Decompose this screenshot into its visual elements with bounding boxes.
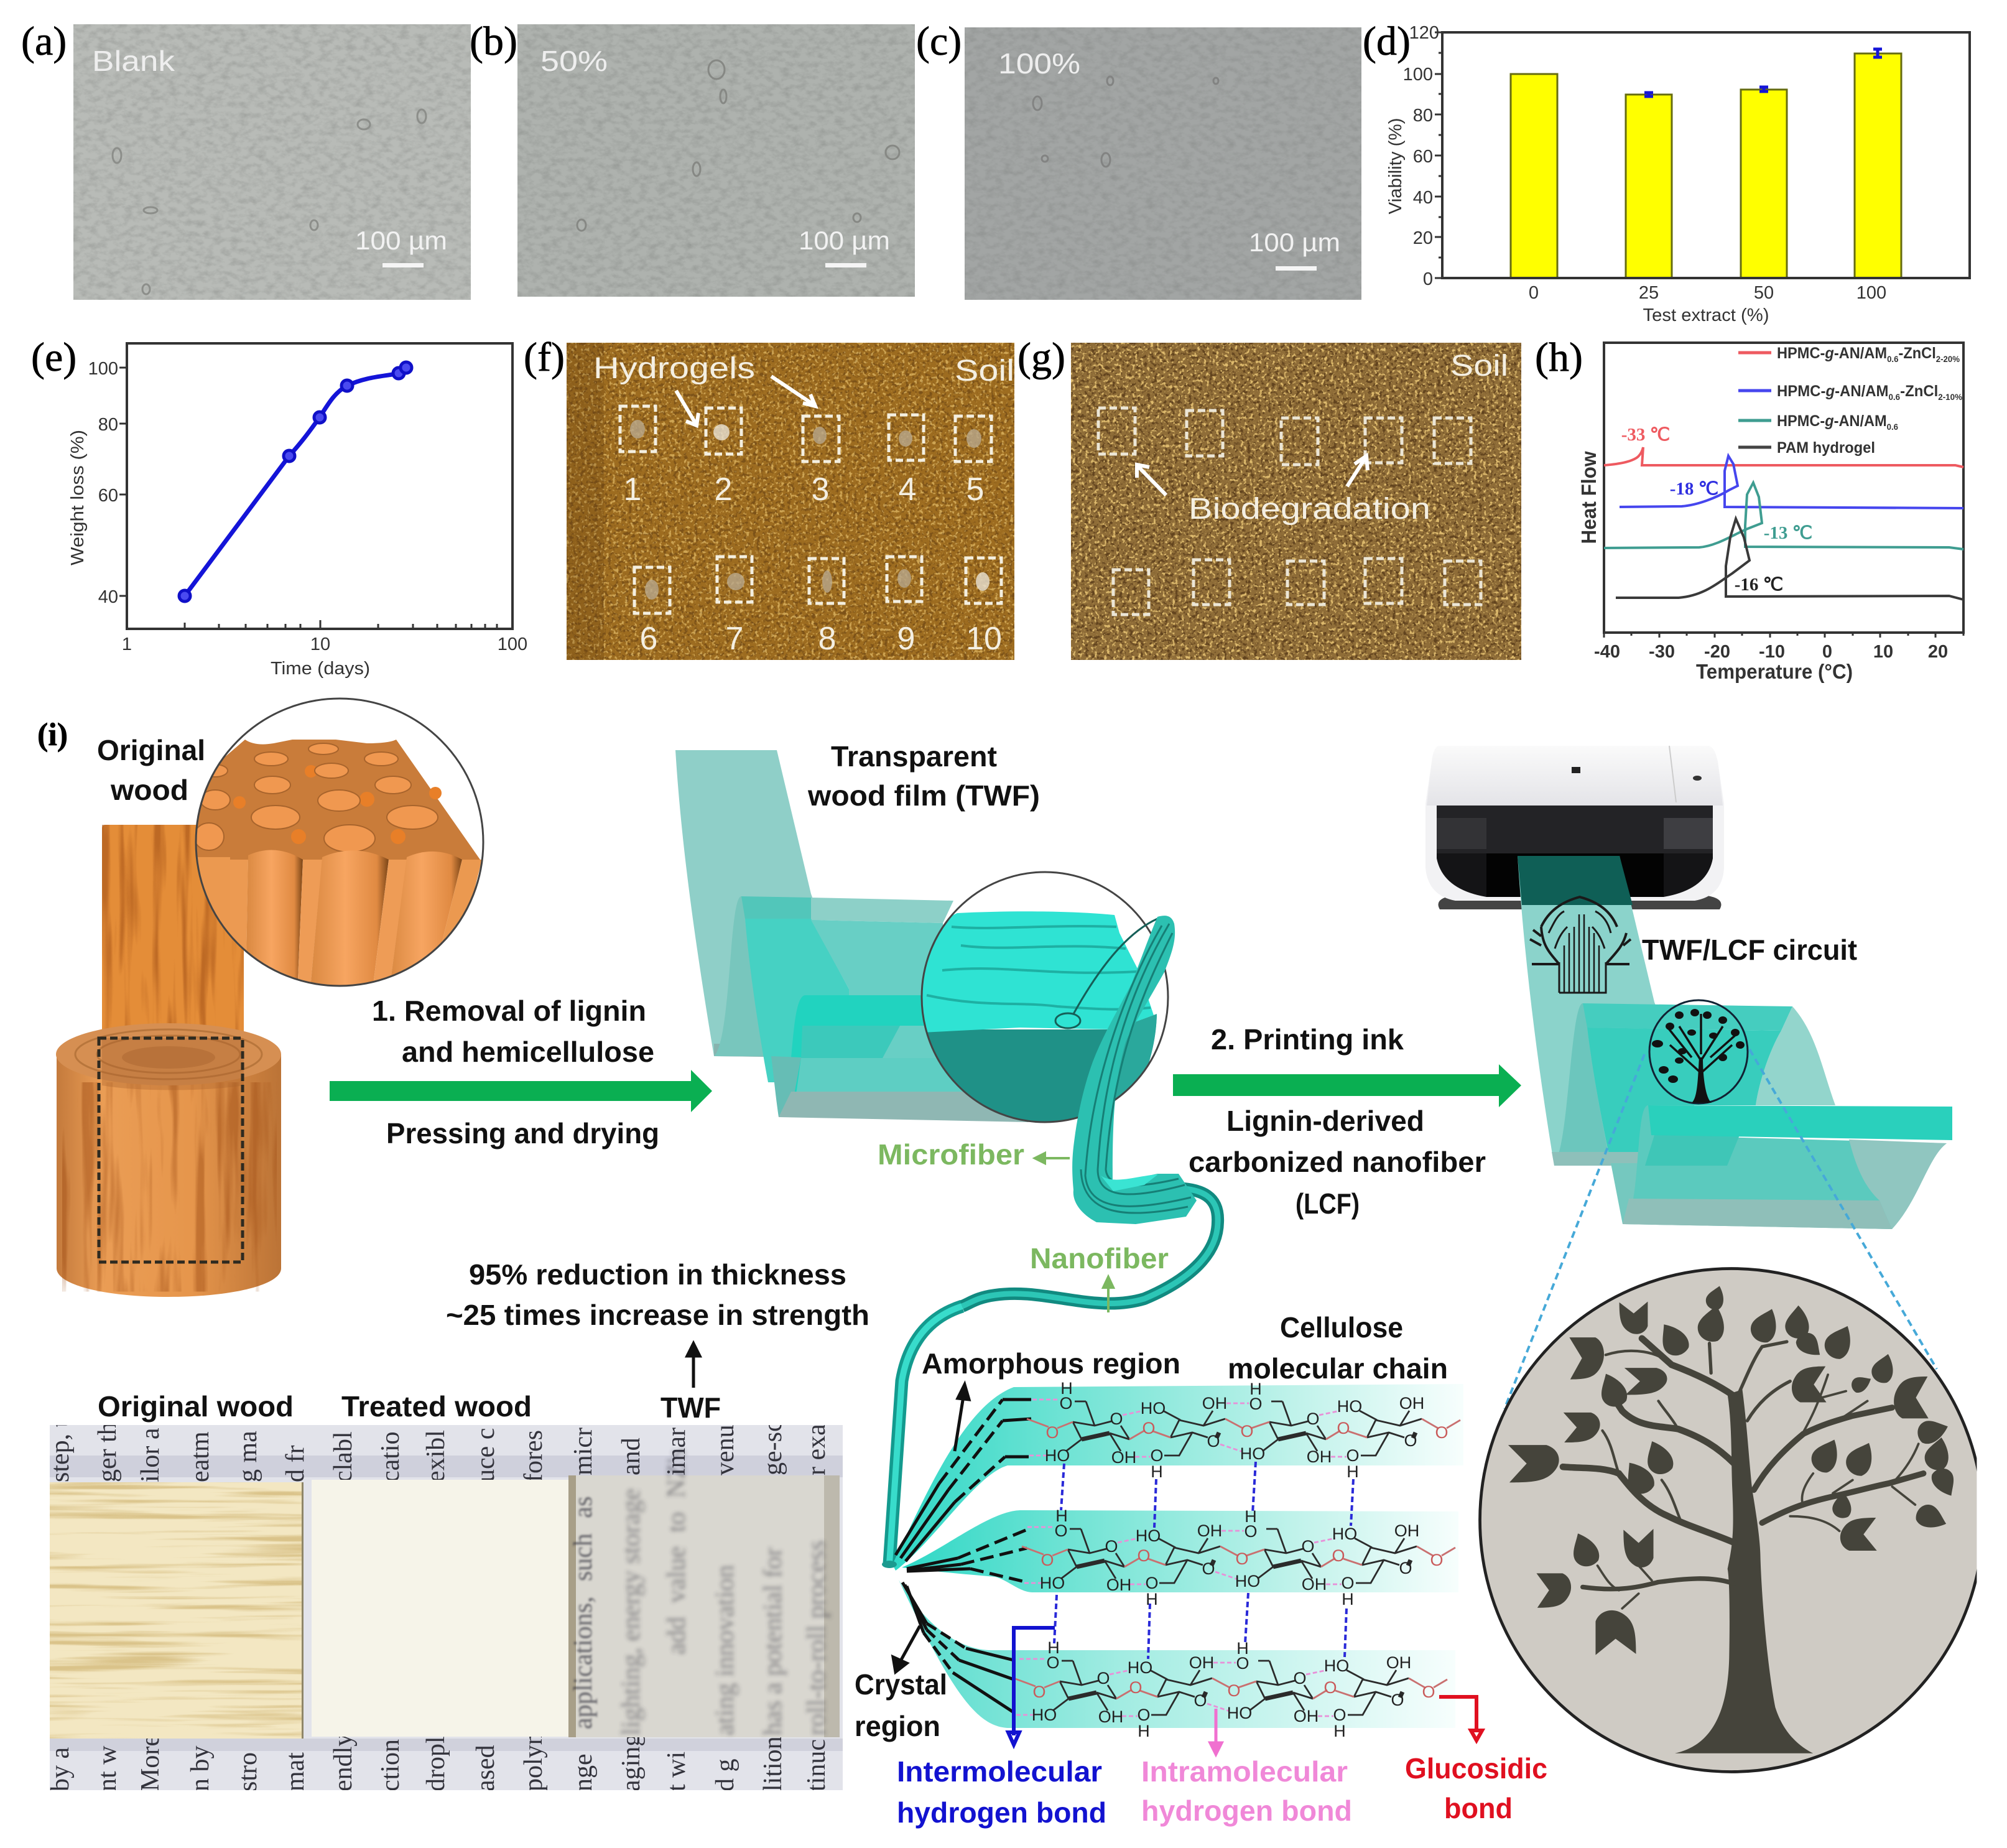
cellulose chain 3: O: [1323, 1678, 1337, 1697]
label (i): (i): [37, 717, 68, 753]
panel e: weight loss line chart: 80: [98, 415, 118, 435]
panel d: viability bar chart: 50: [1754, 283, 1774, 303]
text: removal of lignin step: Pressing and drying: [386, 1117, 659, 1149]
cellulose chain 3: O: [1227, 1681, 1241, 1700]
legend: 2-20%: [1936, 354, 1960, 364]
printed text bottom fragments: stro: [234, 1752, 262, 1791]
printed text bottom fragments: t wi: [662, 1752, 691, 1791]
panel e: weight loss line chart: Weight loss (%): [68, 430, 88, 565]
cellulose chain 2: O: [1041, 1551, 1054, 1569]
panel h: DSC heat flow chart: -40: [1594, 642, 1620, 662]
cellulose fibril bands: [892, 1384, 1463, 1728]
label: Original wood: Original: [97, 734, 205, 766]
curve labels: [1621, 425, 1812, 595]
label (h): (h): [1535, 335, 1583, 380]
printed text top fragments: fores: [519, 1430, 548, 1482]
printed text bottom fragments: nt w: [93, 1745, 122, 1791]
cellulose chain 1: OH: [1399, 1394, 1424, 1413]
TWF ribbon roll (left): [675, 750, 1029, 1122]
labels above photo: Treated wood: [341, 1390, 532, 1423]
printed text bottom fragments: nge: [569, 1753, 598, 1791]
cellulose chain 2: O: [1332, 1546, 1345, 1565]
panel e: weight loss line chart: Time (days): [271, 659, 370, 679]
panel h: DSC heat flow chart: -20: [1704, 642, 1730, 662]
label (c): (c): [916, 19, 962, 64]
magnified printed tree: [1480, 1269, 1983, 1771]
arrows: to hydrogels: [676, 376, 815, 425]
printed text top fragments: uce c: [471, 1428, 500, 1482]
cellulose chain 3: OH: [1189, 1653, 1214, 1672]
printed text top fragments: ger th: [93, 1422, 122, 1482]
labels above photo: Original wood: [98, 1390, 294, 1423]
panel d: viability bar chart: 100: [1856, 283, 1886, 303]
printed text bottom fragments: ction: [376, 1739, 405, 1791]
fibre bundle: microfiber to nanofiber: [889, 916, 1218, 1564]
panel h: DSC heat flow chart: 0: [1822, 642, 1832, 662]
printed text bottom fragments: [50, 1737, 825, 1790]
cellulose chain 2: OH: [1197, 1521, 1222, 1540]
cellulose chain 3: OH: [1294, 1707, 1319, 1725]
panel e: weight loss line chart: [68, 343, 527, 679]
cellulose chain 1: O: [1435, 1423, 1448, 1442]
text: printing ink step: carbonized nanofiber: [1189, 1146, 1486, 1178]
arrow: TWF up to result: [687, 1344, 700, 1388]
treated wood sample: [312, 1480, 568, 1737]
arrow: intermolecular bond pointer: [1008, 1628, 1055, 1745]
cellulose chain 1: OH: [1111, 1448, 1136, 1467]
dashed zoom guide lines: [1504, 1049, 1937, 1409]
cellulose chain 2: O: [1054, 1521, 1068, 1540]
text: thickness and strength result: ~25 times increase in strength: [446, 1299, 869, 1331]
cellulose chain 3: [1014, 1638, 1447, 1740]
panel h: DSC heat flow chart: -10: [1759, 642, 1785, 662]
label: intermolecular hydrogen bond: Intermolecular: [897, 1755, 1102, 1788]
printed text top fragments: eatm: [186, 1431, 215, 1482]
cellulose chain 3: HO: [1128, 1658, 1152, 1677]
panel h: DSC heat flow chart: Heat Flow: [1577, 451, 1600, 544]
cellulose chain 1: H: [1346, 1462, 1359, 1481]
panel e: weight loss line chart: 100: [498, 634, 527, 654]
legend: HPMC-g-AN/AM: [1777, 345, 1890, 362]
cellulose chain 1: O: [1045, 1423, 1059, 1442]
cellulose chain 1: OH: [1202, 1394, 1227, 1413]
cellulose chain 2: O: [1399, 1559, 1412, 1577]
cellulose chain 3: O: [1391, 1691, 1404, 1709]
tree trunk and branches: [1563, 1339, 1924, 1753]
legend: 0.6: [1887, 422, 1898, 432]
cellulose chain 1: H: [1151, 1462, 1163, 1481]
sample numbers: 4: [899, 471, 916, 508]
panel d: viability bar chart: 0: [1423, 269, 1433, 289]
panel d: viability bar chart: Viability (%): [1386, 118, 1406, 214]
text: thickness and strength result: [446, 1258, 869, 1331]
TWF film with blurred text: roll-to-roll process: [802, 1540, 831, 1735]
panel h: DSC heat flow chart: 20: [1928, 642, 1948, 662]
label (b): (b): [470, 19, 517, 64]
text: printing ink step: Lignin-derived: [1226, 1105, 1424, 1137]
arrows: to empty squares: [1137, 456, 1368, 495]
label: intramolecular hydrogen bond: hydrogen bond: [1141, 1795, 1352, 1827]
TWF film with blurred text: lighting, energy storage: [617, 1488, 646, 1735]
panel d: viability bar chart: 100: [1403, 65, 1433, 85]
label: Hydrogels: Hydrogels: [593, 352, 755, 385]
cellulose chain 2: O: [1105, 1537, 1118, 1556]
cellulose chain 1: O: [1337, 1419, 1350, 1437]
curve labels: -33 ℃: [1621, 425, 1670, 445]
printed text bottom fragments: dropl: [422, 1736, 450, 1791]
label: Soil: Soil: [1450, 350, 1508, 383]
cellulose chain 3: O: [1422, 1683, 1435, 1701]
label: intermolecular hydrogen bond: [897, 1755, 1106, 1829]
TWF/LCF ribbon (right): [1518, 856, 1952, 1229]
cellulose chain 2: H: [1146, 1590, 1158, 1609]
cellulose chain 1: O: [1240, 1422, 1254, 1441]
cellulose chain 1: O: [1306, 1409, 1320, 1428]
panel b: 50% cell micrograph: [517, 24, 915, 297]
panel d: viability bar chart: 80: [1413, 106, 1433, 126]
legend: HPMC-g-AN/AM: [1777, 383, 1891, 400]
printed text bottom fragments: n by: [186, 1745, 215, 1791]
text: printing ink step: (LCF): [1296, 1187, 1360, 1220]
cellulose chain 1: O: [1142, 1419, 1156, 1437]
cellulose chain 1: H: [1060, 1379, 1073, 1398]
printed text bottom fragments: d g: [711, 1759, 739, 1791]
label: 100%: 100%: [998, 47, 1080, 80]
label: Original wood: wood: [110, 774, 188, 806]
printed text top fragments: [53, 1425, 825, 1482]
arrow: crystal region: [893, 1626, 920, 1672]
label (a): (a): [21, 19, 67, 64]
panel h: DSC heat flow chart: -30: [1649, 642, 1675, 662]
label: crystal region: [855, 1668, 947, 1742]
scale bar a: 100 µm: [355, 226, 447, 255]
fibre stub cap: [882, 1561, 897, 1568]
tree leaves: [1508, 1283, 1962, 1655]
legend: -ZnCl: [1900, 383, 1938, 400]
label: intermolecular hydrogen bond: hydrogen bond: [897, 1796, 1106, 1829]
cellulose chain 1: OH: [1307, 1447, 1332, 1466]
magnified fibre cross-section: [914, 872, 1168, 1126]
arrow 1: green process arrow: [330, 1070, 712, 1112]
scale bar c: [1249, 228, 1340, 271]
cellulose chain 1: O: [1150, 1446, 1164, 1465]
TWF film with blurred text: has a potential for: [759, 1548, 787, 1735]
cellulose chain 2: O: [1137, 1546, 1151, 1565]
cellulose chain 3: O: [1293, 1669, 1307, 1688]
cellulose chain 2: O: [1430, 1551, 1444, 1569]
printed text top fragments: ge-sc: [759, 1420, 787, 1475]
printed text top fragments: and: [617, 1437, 646, 1475]
printed text bottom fragments: Morec: [136, 1723, 165, 1791]
text: thickness and strength result: 95% reduction in thickness: [469, 1258, 846, 1291]
cellulose chain 3: H: [1047, 1638, 1060, 1657]
cellulose chain 3: O: [1333, 1706, 1346, 1724]
cellulose chain 2: H: [1245, 1507, 1257, 1526]
cellulose chain 3: O: [1137, 1706, 1151, 1724]
printer: [1425, 746, 1724, 909]
cellulose chain 2: OH: [1106, 1576, 1131, 1594]
cellulose chain 2: O: [1244, 1522, 1258, 1541]
cellulose chain 3: O: [1032, 1683, 1046, 1701]
printed text bottom fragments: polyn: [519, 1732, 548, 1791]
cellulose chain 1: O: [1346, 1446, 1360, 1465]
label: intramolecular hydrogen bond: Intramolecular: [1141, 1755, 1348, 1788]
cellulose chain 2: OH: [1302, 1575, 1327, 1594]
label: Original wood: [97, 734, 205, 806]
legend: -ZnCl: [1898, 345, 1936, 362]
printed text top fragments: imar: [662, 1428, 691, 1475]
TWF film with blurred text: ating innovation: [711, 1565, 739, 1735]
cellulose chain 1: O: [1249, 1395, 1263, 1413]
label: Biodegradation: Biodegradation: [1189, 493, 1430, 526]
panel e: weight loss line chart: 10: [310, 634, 330, 654]
label (g): (g): [1017, 335, 1065, 380]
legend: HPMC-g-AN/AM: [1777, 412, 1890, 430]
cellulose chain 2: O: [1235, 1549, 1249, 1568]
cellulose chain 2: H: [1342, 1590, 1354, 1609]
photo: original wood, treated wood and TWF on printed page: [46, 1419, 843, 1791]
printed text bottom fragments: ased: [471, 1745, 500, 1791]
cellulose chain 1: O: [1207, 1432, 1220, 1451]
cellulose chain 2: HO: [1040, 1574, 1065, 1592]
printed text top fragments: clabl: [329, 1431, 358, 1482]
text: printing ink step: 2. Printing ink: [1211, 1023, 1404, 1056]
printed text top fragments: r exa: [802, 1424, 831, 1475]
labels: amorphous region and cellulose chain: Amorphous region: [922, 1347, 1180, 1380]
labels: amorphous region and cellulose chain: [922, 1311, 1448, 1385]
printed text top fragments: g ma: [234, 1431, 262, 1482]
arrow 2: green process arrow: [1173, 1064, 1521, 1107]
cellulose chain 1: O: [1404, 1431, 1417, 1450]
printed text top fragments: catio: [376, 1431, 405, 1482]
labels above photo: TWF: [661, 1391, 721, 1424]
sample numbers: 10: [966, 621, 1002, 657]
legend: 0.6: [1888, 392, 1900, 402]
panel e: weight loss line chart: 60: [98, 486, 118, 506]
sample numbers: 5: [966, 471, 984, 508]
printed text bottom fragments: lition: [759, 1736, 787, 1791]
panel d: viability bar chart: 60: [1413, 147, 1433, 167]
printed text bottom fragments: endly: [329, 1734, 358, 1791]
cellulose chain 2: O: [1145, 1574, 1159, 1592]
cellulose chain 2: O: [1341, 1574, 1355, 1592]
scale bar c: 100 µm: [1249, 228, 1340, 257]
label: glucosidic bond: Glucosidic: [1405, 1752, 1547, 1785]
cellulose chain 1: HO: [1240, 1444, 1265, 1463]
text: printing ink step: [1189, 1023, 1486, 1220]
label: nanofiber with arrow: Nanofiber: [1030, 1242, 1169, 1275]
cellulose chain 1: HO: [1045, 1446, 1070, 1465]
cellulose chain 3: OH: [1098, 1707, 1123, 1726]
cellulose chain 2: H: [1055, 1507, 1068, 1525]
cellulose chain 3: OH: [1386, 1653, 1411, 1672]
intermolecular dashed hydrogen bonds: [1054, 1462, 1353, 1659]
TWF film with blurred text: applications, such as: [569, 1497, 598, 1729]
panel d: viability bar chart: Test extract (%): [1643, 305, 1769, 325]
cellulose chain 3: O: [1129, 1678, 1143, 1697]
cellulose chain 2: [1022, 1507, 1455, 1609]
scale bar b: [799, 226, 890, 267]
printed text bottom fragments: by a: [46, 1747, 75, 1791]
cellulose chain 3: HO: [1324, 1656, 1349, 1675]
cellulose chain 3: H: [1333, 1722, 1346, 1740]
legend: [1738, 345, 1963, 457]
cellulose chain 3: O: [1194, 1691, 1207, 1710]
printed text bottom fragments: aging: [617, 1734, 646, 1791]
label: crystal region: region: [855, 1710, 940, 1742]
label: TWF/LCF circuit: TWF/LCF circuit: [1642, 934, 1857, 966]
curve labels: -18 ℃: [1670, 479, 1718, 499]
legend: 2-10%: [1938, 392, 1963, 402]
printed text top fragments: d fr: [281, 1446, 310, 1482]
label: Soil: Soil: [955, 355, 1014, 388]
icon: circuit tree on film: [1530, 897, 1631, 993]
printed text top fragments: venu: [711, 1424, 739, 1475]
cellulose chain 2: O: [1202, 1559, 1215, 1578]
label: intramolecular hydrogen bond: [1141, 1755, 1352, 1827]
label: transparent wood film: [807, 740, 1040, 812]
cellulose chain 2: HO: [1136, 1526, 1161, 1545]
panel e: weight loss line chart: 1: [122, 634, 132, 654]
wood log with plank: [56, 825, 281, 1297]
sample numbers: [624, 471, 1002, 657]
label: 50%: 50%: [540, 45, 608, 77]
cellulose chain 3: O: [1236, 1654, 1249, 1673]
panel h: DSC heat flow chart: Temperature (°C): [1696, 660, 1853, 683]
cellulose chain 1: [1027, 1379, 1460, 1481]
panel h: DSC heat flow chart: [1577, 343, 1963, 683]
cellulose chain 2: OH: [1394, 1521, 1419, 1540]
icon: small printed tree circle: [1649, 1000, 1748, 1103]
panel e: weight loss line chart: 40: [98, 587, 118, 607]
text: removal of lignin step: and hemicellulose: [402, 1036, 654, 1068]
cellulose chain 1: O: [1059, 1394, 1073, 1413]
cellulose chain 3: O: [1046, 1653, 1060, 1672]
scale bar b: 100 µm: [799, 226, 890, 255]
panel f: soil photo with hydrogels: [567, 343, 1014, 660]
text: removal of lignin step: 1. Removal of lignin: [372, 995, 646, 1027]
arrow: intramolecular bond pointer: [1210, 1709, 1221, 1754]
fan of fibril lines: [896, 1400, 1031, 1712]
curve labels: -16 ℃: [1735, 575, 1783, 595]
label: microfiber with arrow: Microfiber: [878, 1138, 1024, 1171]
curve labels: -13 ℃: [1764, 523, 1812, 543]
panel d: viability bar chart: 120: [1409, 23, 1439, 43]
text: removal of lignin step: [372, 995, 659, 1149]
panel h: DSC heat flow chart: 10: [1873, 642, 1893, 662]
cellulose chain 3: HO: [1227, 1704, 1252, 1722]
printed text bottom fragments: tinuc: [802, 1739, 831, 1791]
printed text bottom fragments: mat: [281, 1752, 310, 1791]
cellulose chain 1: HO: [1337, 1397, 1362, 1416]
sample numbers: 7: [726, 621, 743, 657]
cellulose chain 3: H: [1236, 1639, 1249, 1658]
original wood sample: [50, 1482, 304, 1739]
magnifier: honeycomb wood structure: [187, 699, 483, 995]
panel a: blank cell micrograph: [73, 24, 471, 300]
panel g: soil photo after biodegradation: [1071, 343, 1521, 660]
panel d: viability bar chart: 40: [1413, 188, 1433, 208]
printed text top fragments: ilor a: [136, 1428, 165, 1482]
cellulose chain 1: O: [1110, 1409, 1123, 1428]
cellulose chain 3: H: [1138, 1722, 1150, 1740]
cellulose chain 2: HO: [1235, 1572, 1260, 1590]
label: nanofiber with arrow: [1030, 1242, 1169, 1312]
label: transparent wood film: wood film (TWF): [807, 779, 1040, 812]
panel d: viability bar chart: [1386, 23, 1970, 325]
labels: amorphous region and cellulose chain: molecular chain: [1228, 1352, 1448, 1385]
panel e: weight loss line chart: 100: [88, 359, 118, 379]
panel d: viability bar chart: 0: [1529, 283, 1539, 303]
TWF film with blurred text: [568, 1448, 840, 1737]
TWF film with blurred text: add value to NZ's: [662, 1448, 691, 1655]
cellulose chain 1: H: [1249, 1380, 1262, 1398]
label: Blank: Blank: [92, 45, 175, 77]
arrow: amorphous region: [955, 1385, 969, 1451]
sample numbers: 9: [897, 621, 915, 657]
cellulose chain 3: O: [1096, 1669, 1110, 1688]
panel c: 100% cell micrograph: [965, 27, 1361, 300]
label (e): (e): [31, 335, 76, 380]
label: glucosidic bond: bond: [1444, 1792, 1513, 1824]
printed text top fragments: step, t: [46, 1419, 75, 1482]
sample numbers: 6: [640, 621, 657, 657]
sample numbers: 3: [812, 471, 829, 508]
sample numbers: 2: [715, 471, 732, 508]
panel d: viability bar chart: 20: [1413, 228, 1433, 248]
sample numbers: 1: [624, 471, 641, 508]
label (f): (f): [524, 335, 565, 380]
scale bar a: [355, 226, 447, 267]
label (d): (d): [1363, 19, 1411, 64]
arrow: glucosidic bond pointer: [1439, 1697, 1482, 1740]
printed text top fragments: micr: [569, 1428, 598, 1475]
cellulose chain 1: HO: [1141, 1399, 1166, 1418]
legend: 0.6: [1887, 354, 1899, 364]
legend: PAM hydrogel: [1777, 439, 1875, 457]
cellulose chain 2: O: [1301, 1537, 1315, 1556]
panel d: viability bar chart: 25: [1639, 283, 1659, 303]
cellulose chain 3: HO: [1032, 1706, 1057, 1724]
labels above photo: [98, 1390, 721, 1424]
labels: amorphous region and cellulose chain: Cellulose: [1280, 1311, 1403, 1344]
cellulose chain 2: HO: [1332, 1525, 1357, 1543]
sample numbers: 8: [818, 621, 836, 657]
label: transparent wood film: Transparent: [831, 740, 997, 773]
label: glucosidic bond: [1405, 1752, 1547, 1824]
label: crystal region: Crystal: [855, 1668, 947, 1701]
printed text top fragments: exibl: [422, 1430, 450, 1482]
